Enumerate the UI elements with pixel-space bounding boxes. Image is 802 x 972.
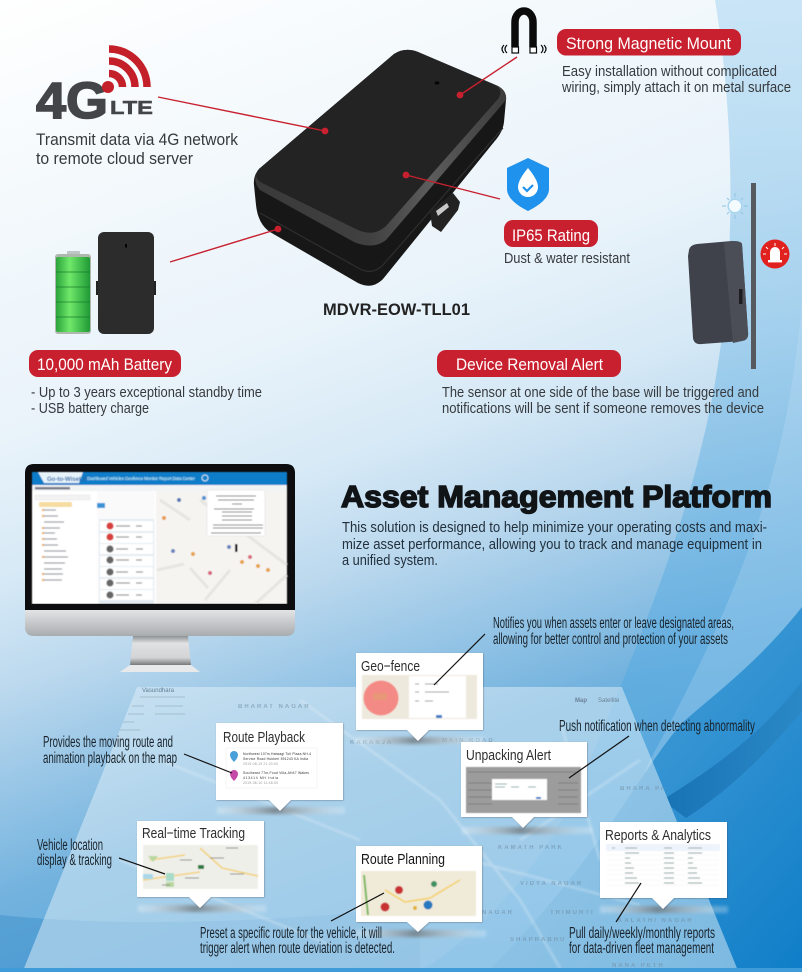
tracking map thumbnail — [143, 845, 258, 889]
callout: Reports & Analytics — [569, 883, 715, 957]
card: Real-time Tracking — [137, 821, 266, 912]
text: removal description: notifications will be sent if someone removes the device — [442, 400, 764, 417]
route map thumbnail — [361, 871, 476, 916]
pointer line: IP65 — [403, 172, 500, 199]
card: Route Playback — [216, 723, 345, 814]
callout: Route Planning: trigger alert when route deviation is detected. — [200, 940, 395, 957]
callout: Real-time Tracking: display & tracking — [37, 852, 112, 869]
background swoosh: lower right — [487, 607, 802, 972]
battery — [55, 251, 91, 334]
map perspective panel: NAGAR — [482, 910, 514, 916]
map perspective panel: Map — [575, 698, 587, 704]
card: Route Planning — [356, 846, 486, 937]
icon: device removal illustration — [688, 183, 790, 369]
route list: Northwest 107m,Hatwagi Toll Plaza,NH-4 — [243, 752, 311, 756]
map perspective panel: KARANJA — [350, 740, 393, 746]
callout: Route Playback: animation playback on the map — [43, 750, 177, 767]
pointer line: magnet — [457, 57, 517, 98]
route list: 2019-08-10 11:48:00 — [243, 781, 278, 785]
small device — [96, 232, 156, 334]
text: removal description — [442, 384, 764, 417]
card: Unpacking Alert: Unpacking Alert — [466, 747, 552, 764]
card: Route Playback: Route Playback — [223, 729, 305, 746]
map perspective panel: KAMATH PARK — [498, 845, 564, 851]
text: magnetic description — [561, 63, 791, 96]
icon: 4G LTE logo: 4G — [36, 72, 108, 129]
map perspective panel: KALATHI NAGAR — [618, 918, 694, 924]
icon: 4G LTE logo — [36, 49, 153, 129]
label: IP65: IP65 Rating — [512, 226, 590, 245]
card: Route Planning: Route Planning — [361, 851, 445, 868]
text: battery description: - Up to 3 years exceptional standby time — [31, 384, 262, 401]
callout: Unpacking Alert — [559, 718, 755, 778]
text: IP65 description: Dust & water resistant — [504, 250, 631, 267]
text: 4G description: to remote cloud server — [36, 149, 193, 168]
text: 4G description — [36, 130, 238, 168]
report table — [606, 844, 720, 885]
route list: 413414 MH India — [243, 776, 278, 780]
sun — [722, 193, 748, 219]
product: black tracker device — [254, 50, 506, 286]
icon: magnet — [502, 11, 546, 53]
label: removal alert: Device Removal Alert — [456, 355, 603, 374]
callout: Reports & Analytics: for data-driven fleet management — [569, 940, 714, 957]
background swoosh: lower left wave — [0, 905, 420, 972]
alert thumbnail — [466, 767, 581, 813]
callout: Geo-fence — [434, 615, 734, 685]
text: 4G description: Transmit data via 4G network — [36, 130, 238, 149]
background swoosh: dark band — [662, 681, 802, 818]
model name: MDVR-EOW-TLL01 — [323, 300, 470, 319]
alarm badge — [760, 240, 790, 268]
card: Geo-fence: Geo−fence — [361, 658, 420, 675]
geo-fence thumbnail — [362, 675, 477, 719]
map perspective panel: NANA PETH — [612, 963, 665, 969]
callout: Route Planning — [200, 893, 395, 957]
route list: 2019-08-19 21:20:00 — [243, 762, 278, 766]
background swoosh: lighter ribbon — [625, 300, 802, 820]
text: battery description — [31, 384, 262, 417]
route list: Southeast 77m,Food Villa,AH47 Wakes — [243, 771, 309, 775]
monitor stand — [120, 636, 200, 672]
text: magnetic description: Easy installation without complicated — [562, 63, 777, 80]
map perspective panel: MAIN ROAD — [442, 738, 495, 744]
heading: platform title: Asset Management Platform — [341, 480, 772, 514]
text: battery description: - USB battery charge — [31, 400, 149, 417]
map perspective panel: Vasundhara — [142, 688, 175, 694]
card: Reports & Analytics: Reports & Analytics — [605, 827, 711, 844]
route list — [226, 748, 317, 788]
card: Real-time Tracking: Real−time Tracking — [142, 825, 245, 842]
monitor screen: Dashboard Vehicles Geofence Monitor Report Data Center — [87, 476, 196, 481]
monitor body — [25, 610, 295, 636]
label: battery — [29, 350, 181, 377]
usb tab — [430, 193, 460, 232]
callout: Route Playback — [43, 734, 232, 773]
callout: Real-time Tracking: Vehicle location — [37, 837, 103, 854]
monitor screen: Go-to-WiseLiF — [47, 477, 88, 483]
label: IP65 — [504, 220, 598, 247]
card: Unpacking Alert — [461, 742, 592, 834]
callout: Real-time Tracking — [37, 837, 165, 874]
text: platform description: a unified system. — [342, 552, 438, 569]
icon: battery and device — [55, 232, 156, 334]
callout: Route Playback: Provides the moving route and — [43, 734, 173, 751]
label: magnetic mount: Strong Magnetic Mount — [566, 34, 731, 53]
pointer line: battery — [170, 226, 281, 262]
callout: Route Planning: Preset a specific route for the vehicle, it will — [200, 925, 382, 942]
map perspective panel: TRIMURTI — [550, 910, 595, 916]
label: removal alert — [437, 350, 621, 377]
map perspective panel: SHAPRABHU — [510, 937, 566, 943]
map perspective panel: VIDYA NAGAR — [520, 881, 583, 887]
monitor — [25, 464, 295, 672]
monitor screen — [32, 472, 287, 604]
card: Reports & Analytics — [600, 822, 728, 913]
map perspective panel: Satellite — [598, 698, 620, 704]
label: battery: 10,000 mAh Battery — [37, 355, 172, 374]
icon: 4G LTE logo: LTE — [110, 98, 153, 118]
text: removal description: The sensor at one side of the base will be triggered and — [442, 384, 759, 401]
bottom strip — [0, 968, 802, 972]
pointer line: 4G — [158, 97, 328, 134]
route list: Service Road Hukkeri 591243 KA India — [243, 757, 308, 761]
map perspective panel: BHARAT NAGAR — [238, 704, 311, 710]
callout: Reports & Analytics: Pull daily/weekly/monthly reports — [569, 925, 715, 942]
icon: water shield — [507, 158, 549, 211]
card: Geo-fence — [356, 653, 484, 744]
map perspective panel: BHARA PARK — [620, 786, 680, 792]
map perspective panel — [24, 687, 737, 969]
background swoosh: right light band — [420, 0, 802, 972]
label: magnetic mount — [557, 29, 741, 56]
text: platform description — [342, 519, 767, 569]
